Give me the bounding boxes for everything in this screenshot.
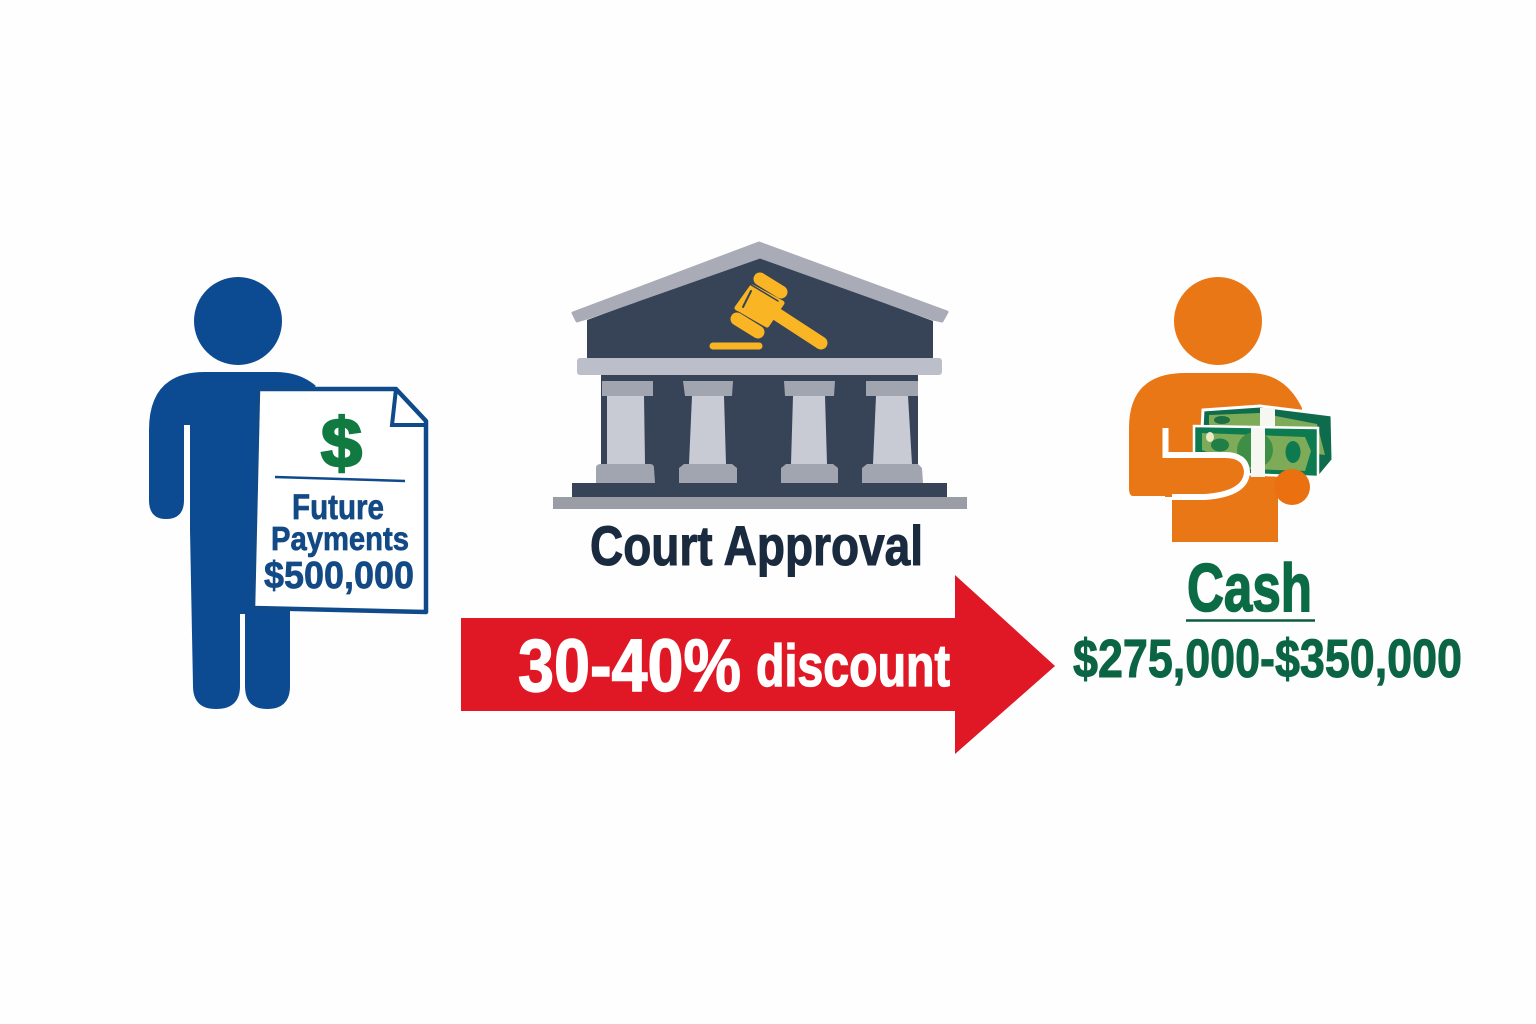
panel: seller with future payments [149,277,426,709]
icon: blue person [149,277,316,709]
label: discount: discount [756,633,950,699]
arrow: discount [461,575,1055,754]
panel: recipient with cash [1073,277,1462,689]
document: future payments [253,389,426,612]
icon: orange person [1129,277,1302,542]
heading: Court Approval: Court Approval [590,514,923,577]
columns [596,381,923,483]
icon: courthouse [553,243,967,509]
panel: court approval [553,243,967,577]
icon: cash bundle [1194,406,1333,478]
heading: Cash: Cash [1187,550,1312,626]
icon: arm and hand [1165,428,1310,505]
label: $500,000: $500,000 [264,555,414,597]
icon: dollar sign: $ [321,404,362,482]
icon: gavel [713,279,821,346]
label: 30-40%: 30-40% [518,624,741,707]
label: cash amount range: $275,000-$350,000 [1073,629,1462,689]
label: Payments: Payments [271,520,409,557]
label: Future: Future [292,488,384,527]
